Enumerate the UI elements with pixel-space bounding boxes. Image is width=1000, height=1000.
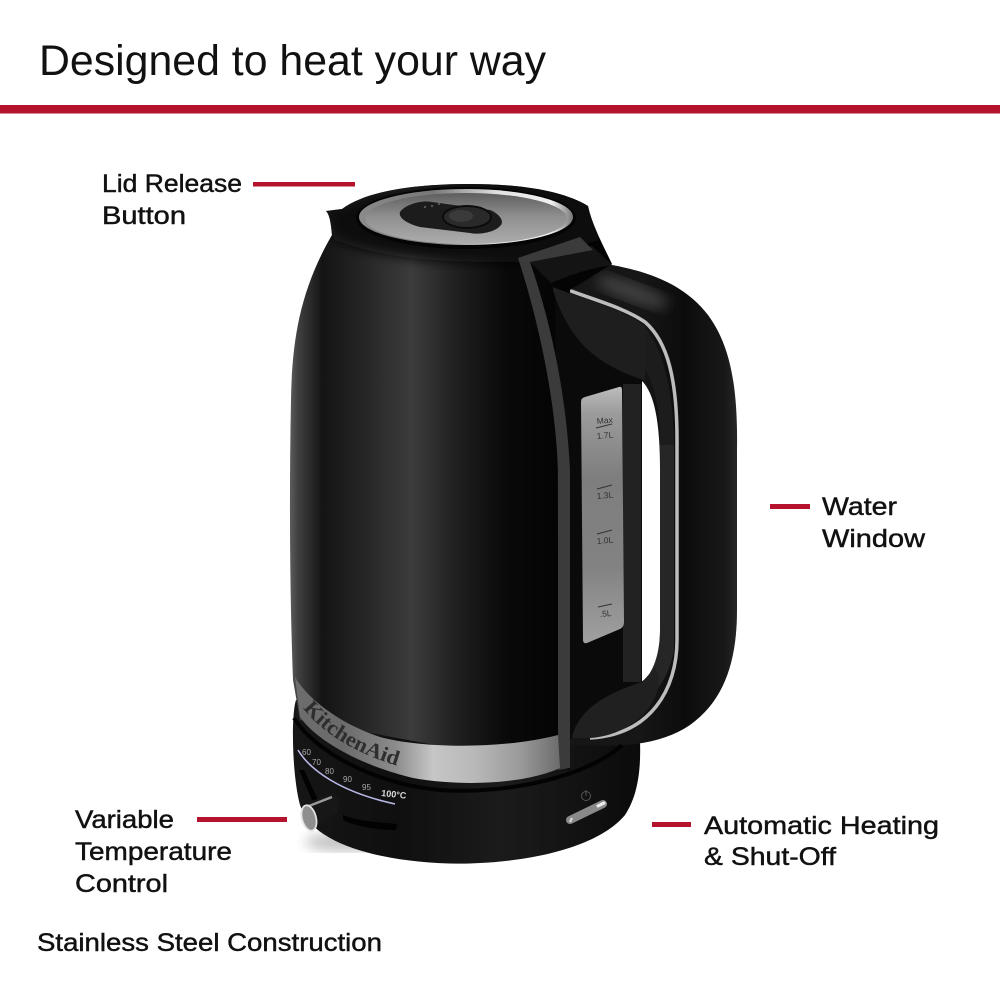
handle — [540, 260, 737, 746]
handle inner strip — [572, 430, 674, 738]
temperature scale: 80 — [325, 767, 334, 776]
slots — [299, 770, 397, 830]
brand text — [303, 708, 402, 767]
label: water window: Window — [822, 525, 926, 553]
steel band: KitchenAid — [303, 700, 400, 766]
temperature scale: 90 — [343, 775, 352, 784]
power icon and button — [570, 790, 604, 822]
top shoulder darkening — [320, 180, 600, 262]
dark column behind window — [553, 290, 642, 745]
label: water window — [770, 493, 926, 553]
water window: 1.3L — [596, 490, 614, 501]
kettle body — [290, 184, 612, 770]
temperature scale: 100°C — [381, 788, 407, 801]
lid release button — [400, 202, 502, 234]
base top gap — [294, 718, 622, 791]
shadow — [305, 833, 385, 851]
water window: 1.7L — [596, 430, 614, 441]
water window: .5L — [599, 608, 612, 619]
kettle — [290, 184, 738, 864]
label: lid release button — [102, 170, 355, 230]
title: Designed to heat your way — [39, 37, 546, 85]
temperature scale: 70 — [312, 758, 321, 767]
water window: 1.0L — [596, 535, 614, 546]
label: lid release button: Button — [102, 202, 186, 230]
label: automatic heating and shut-off — [652, 812, 939, 871]
temperature scale: 60 — [302, 748, 311, 757]
label: variable temperature control — [75, 806, 287, 898]
handle upper glow — [593, 270, 671, 314]
steel band — [295, 678, 560, 783]
temperature scale: 95 — [362, 783, 371, 792]
label: water window: Water — [822, 493, 897, 521]
label: automatic heating and shut-off: & Shut-Off — [704, 843, 836, 871]
label: variable temperature control: Variable — [75, 806, 174, 834]
handle foot — [572, 668, 659, 738]
temperature scale — [298, 748, 407, 804]
gray strip along handle — [518, 237, 593, 770]
handle silver trim — [551, 283, 677, 738]
label: lid release button: Lid Release — [102, 170, 242, 198]
handle hole — [641, 380, 660, 682]
label: automatic heating and shut-off: Automatic Heating — [704, 812, 939, 840]
label: stainless steel construction: Stainless Steel Construction — [37, 929, 382, 957]
red header rule — [0, 105, 1000, 114]
label: variable temperature control: Control — [75, 870, 168, 898]
temperature knob — [299, 793, 339, 832]
base — [293, 700, 640, 864]
label: variable temperature control: Temperature — [75, 838, 232, 866]
black neck connector — [530, 246, 612, 283]
lid — [356, 187, 576, 249]
dark strip beside window — [623, 384, 641, 682]
water window: Max — [596, 415, 614, 426]
dark panel under silver trim — [553, 287, 645, 380]
water window — [581, 387, 624, 643]
